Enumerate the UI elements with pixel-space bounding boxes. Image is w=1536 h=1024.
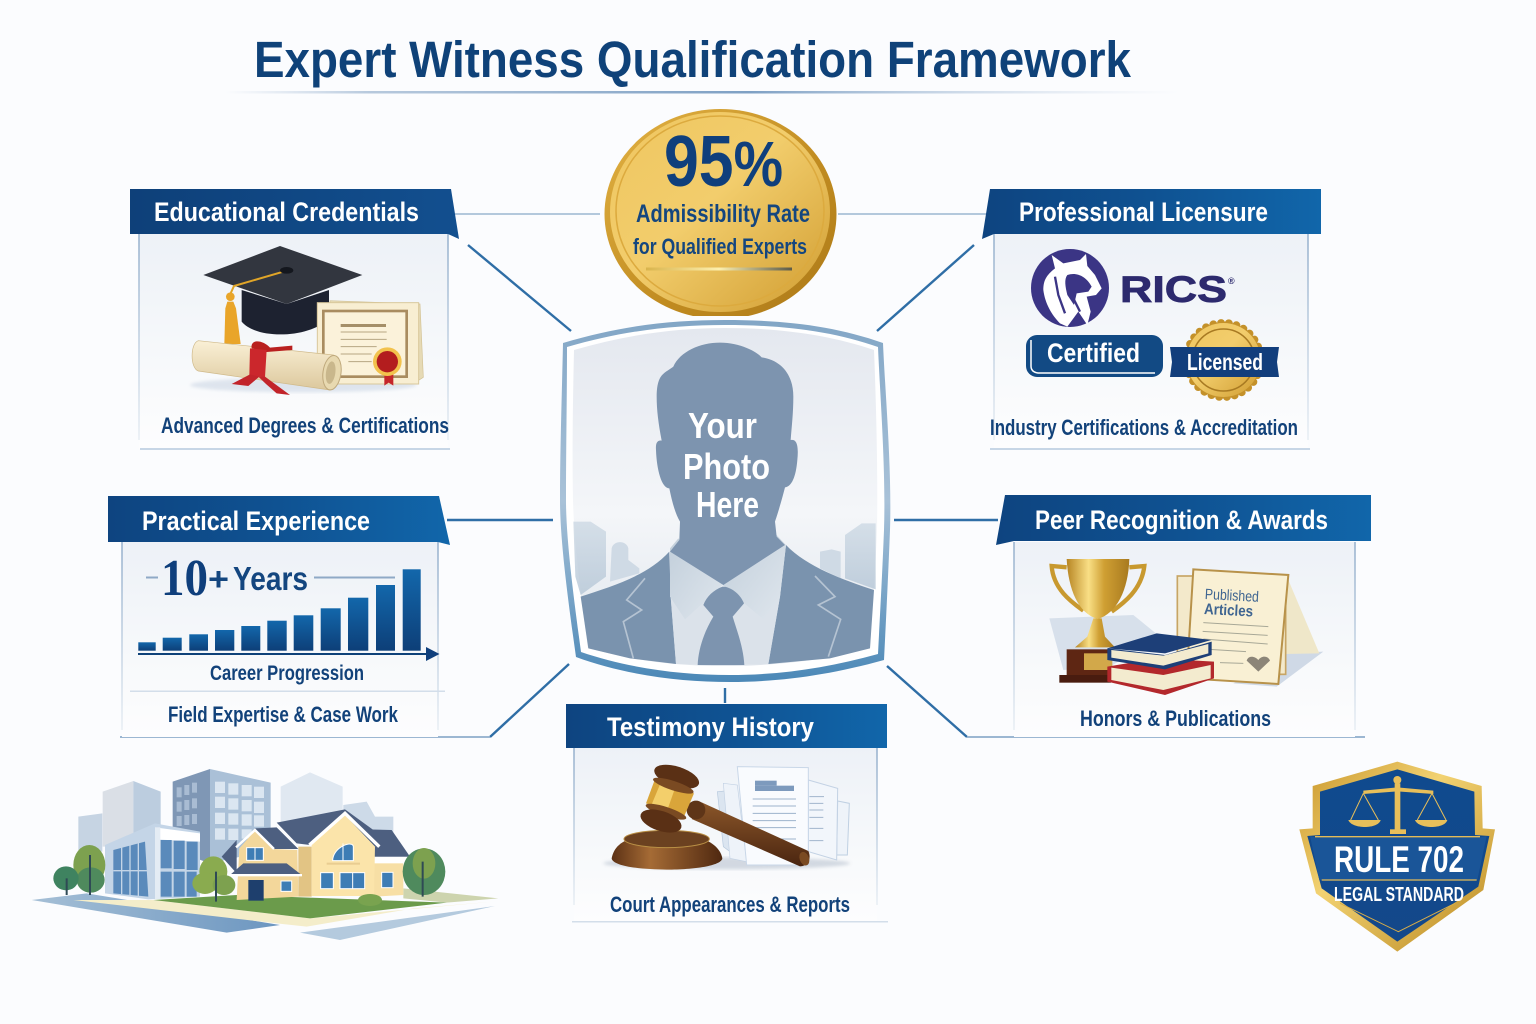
gold medal: 95% admissibility rate <box>600 109 840 328</box>
panel: peer recognition and awards <box>996 495 1371 737</box>
banner <box>130 189 459 239</box>
badge: licensed seal: Licensed <box>1187 349 1263 375</box>
panel: practical experience <box>108 496 450 737</box>
bar chart: career progression <box>138 569 440 661</box>
stat: 10+ years: 10 <box>161 550 208 607</box>
icon: RICS logo: ® <box>1228 276 1235 286</box>
heading: Peer Recognition & Awards <box>1035 505 1328 535</box>
icon: trophy, books and published articles: Published <box>1204 586 1259 606</box>
placeholder text: Your <box>688 405 757 446</box>
medal figure: 95% <box>664 122 783 202</box>
icon: trophy, books and published articles: Articles <box>1204 601 1254 621</box>
placeholder text: Here <box>696 484 759 525</box>
silhouette <box>573 343 876 665</box>
icon: gavel and documents <box>603 760 850 870</box>
stat: 10+ years: Years <box>233 560 308 597</box>
placeholder text: Photo <box>683 446 770 487</box>
stat: 10+ years <box>146 550 395 607</box>
badge: certified <box>1026 335 1163 377</box>
banner <box>982 189 1321 239</box>
title: Expert Witness Qualification Framework <box>254 31 1132 88</box>
banner <box>566 704 887 748</box>
heading: Professional Licensure <box>1019 197 1268 227</box>
heading: Educational Credentials <box>154 197 419 227</box>
photo area <box>573 328 877 666</box>
heading: Testimony History <box>607 712 814 742</box>
panel: testimony history <box>566 704 888 922</box>
placeholder text <box>683 405 770 525</box>
caption: Court Appearances & Reports <box>610 892 850 917</box>
icon: graduation cap, diploma and scroll <box>190 246 423 395</box>
badge: rule 702 legal standard shield <box>1299 762 1495 952</box>
connector lines <box>120 214 1365 737</box>
panel: educational credentials <box>130 189 459 450</box>
banner <box>108 496 450 545</box>
medal sublabel: for Qualified Experts <box>633 234 807 259</box>
portrait frame: your photo here <box>560 320 890 682</box>
medal label: Admissibility Rate <box>636 200 810 228</box>
icon: RICS logo: RICS <box>1120 269 1227 310</box>
chart label: Career Progression <box>210 662 364 685</box>
caption: Advanced Degrees & Certifications <box>161 413 449 438</box>
illustration: city buildings and house <box>32 769 498 940</box>
badge: rule 702 legal standard shield: LEGAL STANDARD <box>1334 884 1464 906</box>
heading: Practical Experience <box>142 506 370 536</box>
caption: Honors & Publications <box>1080 706 1271 731</box>
badge: licensed seal <box>1170 323 1279 397</box>
stat: 10+ years: + <box>208 561 229 597</box>
icon: RICS logo <box>1031 249 1235 327</box>
panel: professional licensure <box>982 189 1321 450</box>
icon: trophy, books and published articles <box>1049 559 1323 695</box>
badge: rule 702 legal standard shield: RULE 702 <box>1334 839 1464 880</box>
banner <box>996 495 1371 545</box>
caption: Field Expertise & Case Work <box>168 702 399 727</box>
caption: Industry Certifications & Accreditation <box>990 415 1298 440</box>
badge: certified: Certified <box>1047 338 1140 368</box>
